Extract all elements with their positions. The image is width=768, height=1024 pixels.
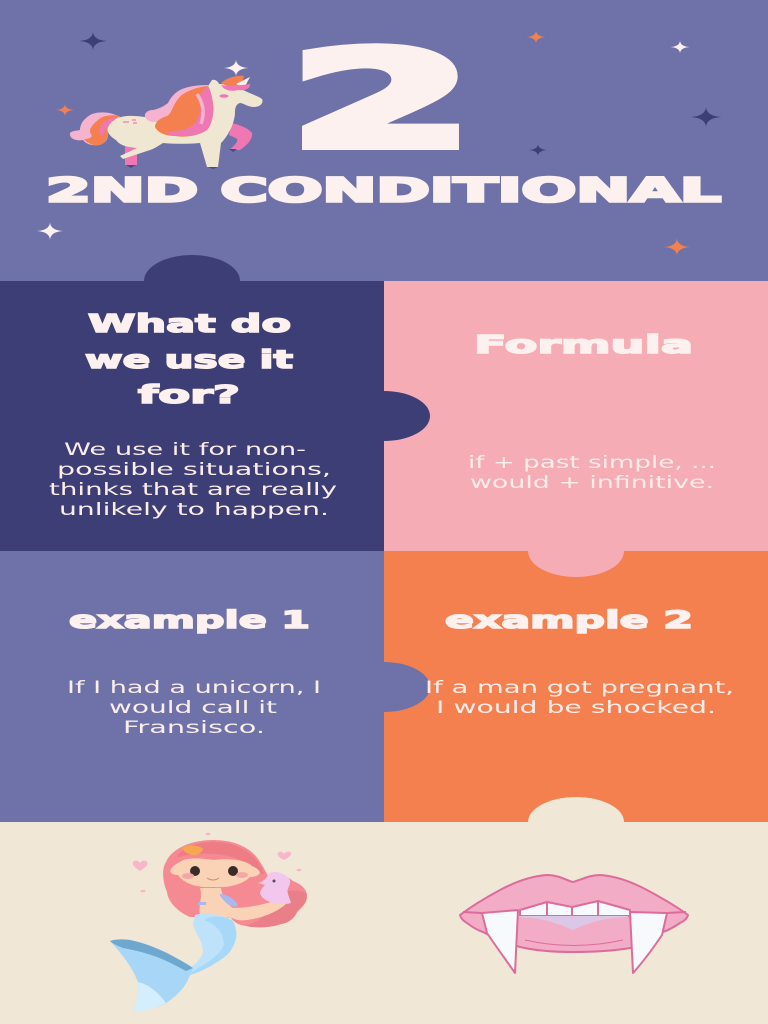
spots [123, 120, 137, 123]
hair [163, 840, 307, 927]
forelock and horn [221, 76, 244, 86]
puzzle tab top [144, 255, 240, 307]
tongue [518, 916, 628, 930]
body text [67, 678, 321, 738]
body text: thinks that are really [49, 480, 337, 500]
heading [85, 309, 293, 409]
fin [110, 939, 193, 1012]
icon: unicorn [70, 76, 263, 169]
face [170, 858, 260, 887]
heading: we use it [85, 345, 293, 374]
body text: If a man got pregnant, [425, 678, 734, 698]
panel: what do we use it for [0, 255, 384, 551]
body text: would call it [109, 698, 278, 718]
heading: Formula [474, 330, 693, 359]
puzzle tab bottom of formula panel [528, 525, 624, 577]
eyes [190, 866, 200, 876]
panel: header background [0, 0, 768, 281]
decorative stars [37, 31, 721, 256]
body text: if + past simple, ... [468, 453, 716, 473]
body text: If I had a unicorn, I [67, 678, 321, 698]
heading: What do [88, 309, 291, 338]
panel: bottom band [0, 797, 768, 1024]
icon: vampire mouth [460, 875, 688, 973]
body text: Fransisco. [123, 718, 265, 738]
shell [182, 846, 203, 855]
body text: possible situations, [57, 460, 331, 480]
teeth [520, 901, 630, 916]
body text [468, 453, 716, 493]
puzzle tab right of dark panel [338, 391, 430, 441]
puzzle tab top [528, 797, 624, 847]
bikini [219, 894, 238, 907]
icon: mermaid [110, 833, 307, 1012]
body text: would + infinitive. [470, 473, 714, 493]
inner lower lip [525, 940, 623, 946]
puzzle tab right of example 1 [338, 662, 430, 712]
hearts [133, 861, 148, 871]
body [107, 80, 263, 167]
lips [460, 875, 688, 952]
torso and arm [200, 888, 287, 920]
fangs [482, 910, 518, 973]
panel: example 2 [338, 525, 768, 822]
big numeral 2: 2 [289, 23, 474, 178]
tail [183, 914, 236, 975]
far legs [125, 143, 137, 165]
title: 2ND CONDITIONAL [46, 170, 721, 210]
seahorse [258, 872, 291, 904]
body text: I would be shocked. [436, 698, 716, 718]
panel: example 1 [0, 551, 384, 822]
body text [49, 440, 337, 520]
tail [70, 112, 120, 145]
panel: formula [384, 281, 768, 551]
mane [145, 85, 212, 122]
body text: unlikely to happen. [59, 500, 329, 520]
heading: example 2 [445, 606, 693, 634]
mouth corners [463, 912, 686, 913]
eye [220, 94, 228, 98]
body text [425, 678, 734, 718]
heading: example 1 [69, 606, 310, 634]
heading: for? [138, 380, 240, 409]
body text: We use it for non- [64, 440, 306, 460]
